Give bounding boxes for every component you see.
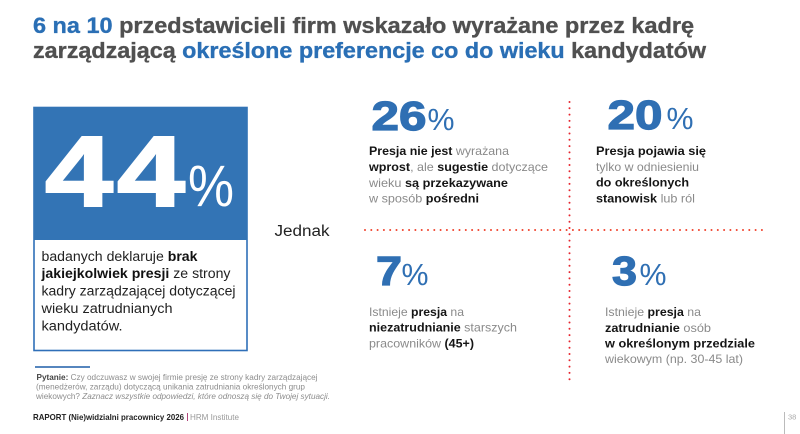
title: zarządzającą określone preferencje co do wieku kandydatów xyxy=(33,38,707,63)
footer: RAPORT (Nie)widzialni pracownicy 2026 xyxy=(33,412,184,422)
stat: 7%: 7 xyxy=(376,248,402,294)
page number: 38 xyxy=(788,412,796,422)
horizontal dotted divider xyxy=(365,229,763,231)
stat: 20% xyxy=(608,92,694,138)
panel: 44% xyxy=(34,107,248,350)
stat: 3% xyxy=(612,248,666,294)
text: 44% description: wieku zatrudnianych xyxy=(40,301,173,317)
page number xyxy=(784,412,796,434)
question note xyxy=(35,367,330,401)
text: 20% description: Presja pojawia się xyxy=(596,144,706,158)
title xyxy=(33,13,707,63)
text: 26% description: Presja nie jest wyrażana xyxy=(369,144,509,158)
text: 7% description: niezatrudnianie starszych xyxy=(369,320,517,334)
title: 6 na 10 przedstawicieli firm wskazało wyrażane przez kadrę xyxy=(33,13,694,38)
panel: 26% xyxy=(368,93,548,206)
stat: 44: 4 xyxy=(45,116,113,228)
footer: HRM Institute xyxy=(190,412,239,422)
stat: 44 xyxy=(45,116,185,228)
label: Jednak: Jednak xyxy=(274,223,330,240)
text: 26% description: wieku są przekazywane xyxy=(368,176,508,190)
text: 44% description: badanych deklaruje brak xyxy=(42,249,198,265)
text: 3% description: wiekowym (np. 30-45 lat) xyxy=(604,352,743,366)
text: 20% description: do określonych xyxy=(596,176,689,190)
stat: 20%: % xyxy=(666,101,694,136)
text: 3% description: Istnieje presja na xyxy=(605,305,701,319)
panel: 3% xyxy=(604,248,755,366)
text: 20% description: stanowisk lub ról xyxy=(596,192,695,206)
question note: Pytanie: Czy odczuwasz w swojej firmie presję ze strony kadry zarządzającej xyxy=(36,372,318,382)
text: 26% description xyxy=(368,144,548,206)
text: 3% description: w określonym przedziale xyxy=(604,336,755,350)
text: 44% description: kadry zarządzającej dotyczącej xyxy=(42,284,236,300)
text: 3% description xyxy=(604,305,755,366)
panel: 7% xyxy=(369,248,517,350)
question note: (menedżerów, zarządu) dotyczącą unikania zatrudniania określonych grup xyxy=(36,382,305,392)
stat: 20%: 20 xyxy=(608,92,662,138)
stat: 3%: 3 xyxy=(612,248,637,294)
text: 3% description: zatrudnianie osób xyxy=(605,321,711,335)
stat: percent sign: % xyxy=(188,154,234,219)
panel: 20% xyxy=(596,92,706,206)
stat: 7%: % xyxy=(402,257,428,292)
text: 44% description: jakiejkolwiek presji ze strony xyxy=(41,266,231,282)
stat: 26% xyxy=(372,93,454,139)
stat: 26%: 26 xyxy=(372,93,426,139)
stat: 3%: % xyxy=(640,257,666,292)
question note: wiekowych? Zaznacz wszystkie odpowiedzi, które odnoszą się do Twojej sytuacji. xyxy=(35,391,330,401)
text: 26% description: wprost, ale sugestie dotyczące xyxy=(368,160,548,174)
stat: 44: 4 xyxy=(117,116,185,228)
text: 7% description: pracowników (45+) xyxy=(369,336,474,350)
text: 26% description: w sposób pośredni xyxy=(368,192,479,206)
text: 20% description: tylko w odniesieniu xyxy=(596,160,699,174)
text: 7% description xyxy=(369,305,517,350)
text: 20% description xyxy=(596,144,706,206)
text: 7% description: Istnieje presja na xyxy=(369,305,464,319)
vertical dotted divider xyxy=(568,102,570,384)
text: 44% description: kandydatów. xyxy=(42,318,122,334)
stat: 7% xyxy=(376,248,428,294)
text: 44% description xyxy=(40,249,236,334)
stat: 26%: % xyxy=(428,102,454,137)
